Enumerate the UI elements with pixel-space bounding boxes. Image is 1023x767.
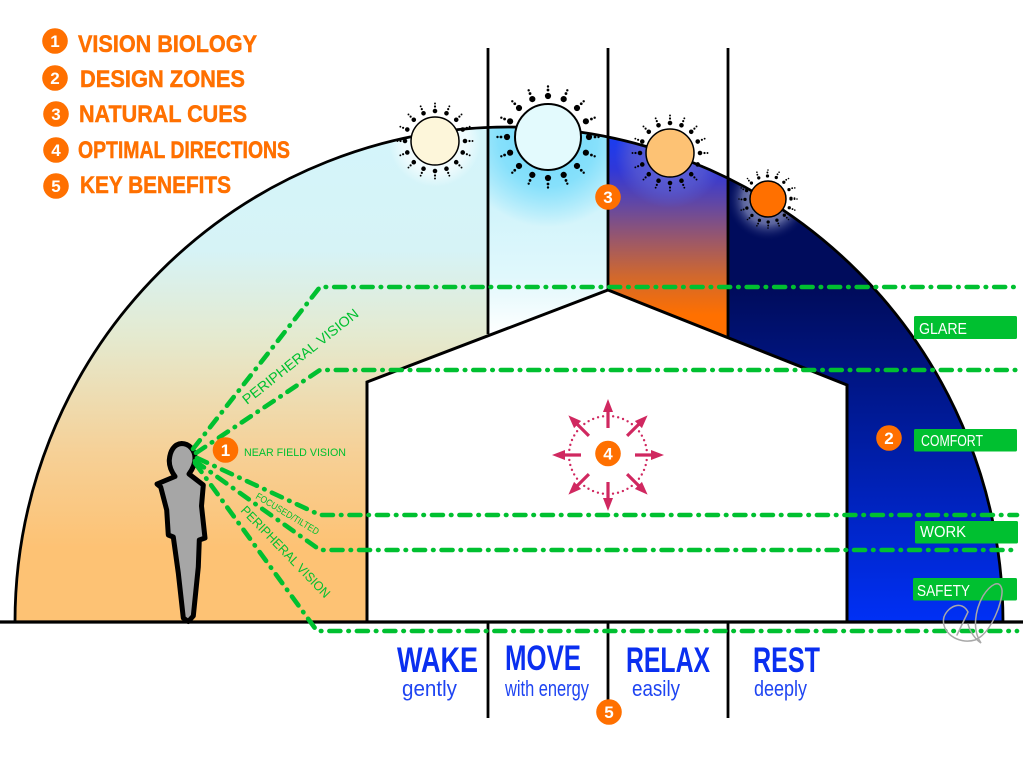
zone tag: work: WORK <box>920 524 966 541</box>
zone tag: glare <box>914 316 1017 339</box>
marker 3: natural cues: 3 <box>603 188 613 207</box>
marker 3: natural cues <box>595 184 621 210</box>
zone tag: safety <box>913 578 1017 600</box>
legend item 5: KEY BENEFITS <box>80 172 231 199</box>
benefit: relax easily <box>626 641 710 701</box>
marker 4: optimal directions <box>595 441 621 466</box>
zone tag: safety: SAFETY <box>917 583 970 600</box>
legend item 4: OPTIMAL DIRECTIONS <box>78 137 290 164</box>
benefit: wake gently <box>397 641 478 701</box>
zone tag: glare: GLARE <box>919 321 967 338</box>
legend item 2: DESIGN ZONES <box>80 66 245 93</box>
benefit: rest deeply: REST <box>753 641 820 680</box>
marker 5: key benefits: 5 <box>604 703 614 722</box>
marker 1: vision biology <box>213 437 238 463</box>
zone: move sky gradient <box>489 128 607 320</box>
legend item 1: 1 <box>50 32 60 51</box>
sun: relax <box>632 116 708 190</box>
benefit: wake gently: gently <box>402 676 457 701</box>
benefit: rest deeply: deeply <box>754 676 807 701</box>
marker 2: design zones: 2 <box>884 429 894 448</box>
legend item 3: 3 <box>51 105 61 124</box>
benefit: relax easily: RELAX <box>626 641 710 680</box>
benefit: move with energy: with energy <box>504 676 589 701</box>
zone: wake sky gradient <box>16 129 488 620</box>
legend item 4: 4 <box>51 141 61 160</box>
vision label: peripheral upper: PERIPHERAL VISION <box>239 305 362 407</box>
legend item 1 <box>42 28 257 58</box>
signature scribble <box>943 584 1002 643</box>
vision label: peripheral lower: PERIPHERAL VISION <box>238 503 333 601</box>
legend item 1: VISION BIOLOGY <box>78 31 257 58</box>
marker 5: key benefits <box>596 699 622 725</box>
zone tag: comfort: COMFORT <box>921 433 983 450</box>
sun: move <box>498 86 598 188</box>
person silhouette <box>157 444 205 622</box>
zone tag: work <box>915 521 1018 544</box>
marker 2: design zones <box>876 425 902 451</box>
benefit: relax easily: easily <box>632 676 680 701</box>
direction arrows with dotted circle <box>552 399 664 511</box>
benefit: move with energy: MOVE <box>505 639 581 678</box>
vision lines <box>193 287 1017 631</box>
marker 1: vision biology: 1 <box>221 441 230 460</box>
vision label: focused tilted: FOCUSED/TILTED <box>253 491 321 538</box>
legend item 5: 5 <box>51 177 61 196</box>
sun: rest <box>739 170 797 228</box>
marker 4: optimal directions: 4 <box>603 444 613 464</box>
zone tag: comfort <box>914 429 1017 452</box>
legend <box>42 28 290 199</box>
sun: wake <box>398 104 472 178</box>
legend item 2: 2 <box>50 69 60 88</box>
benefit: move with energy <box>504 639 589 701</box>
benefit: rest deeply <box>753 641 820 701</box>
benefit: wake gently: WAKE <box>397 641 478 680</box>
vision label: near field: NEAR FIELD VISION <box>244 447 346 459</box>
legend item 3: NATURAL CUES <box>79 101 247 128</box>
zone: relax sky gradient <box>609 138 727 336</box>
zone: rest sky gradient <box>729 180 1002 620</box>
